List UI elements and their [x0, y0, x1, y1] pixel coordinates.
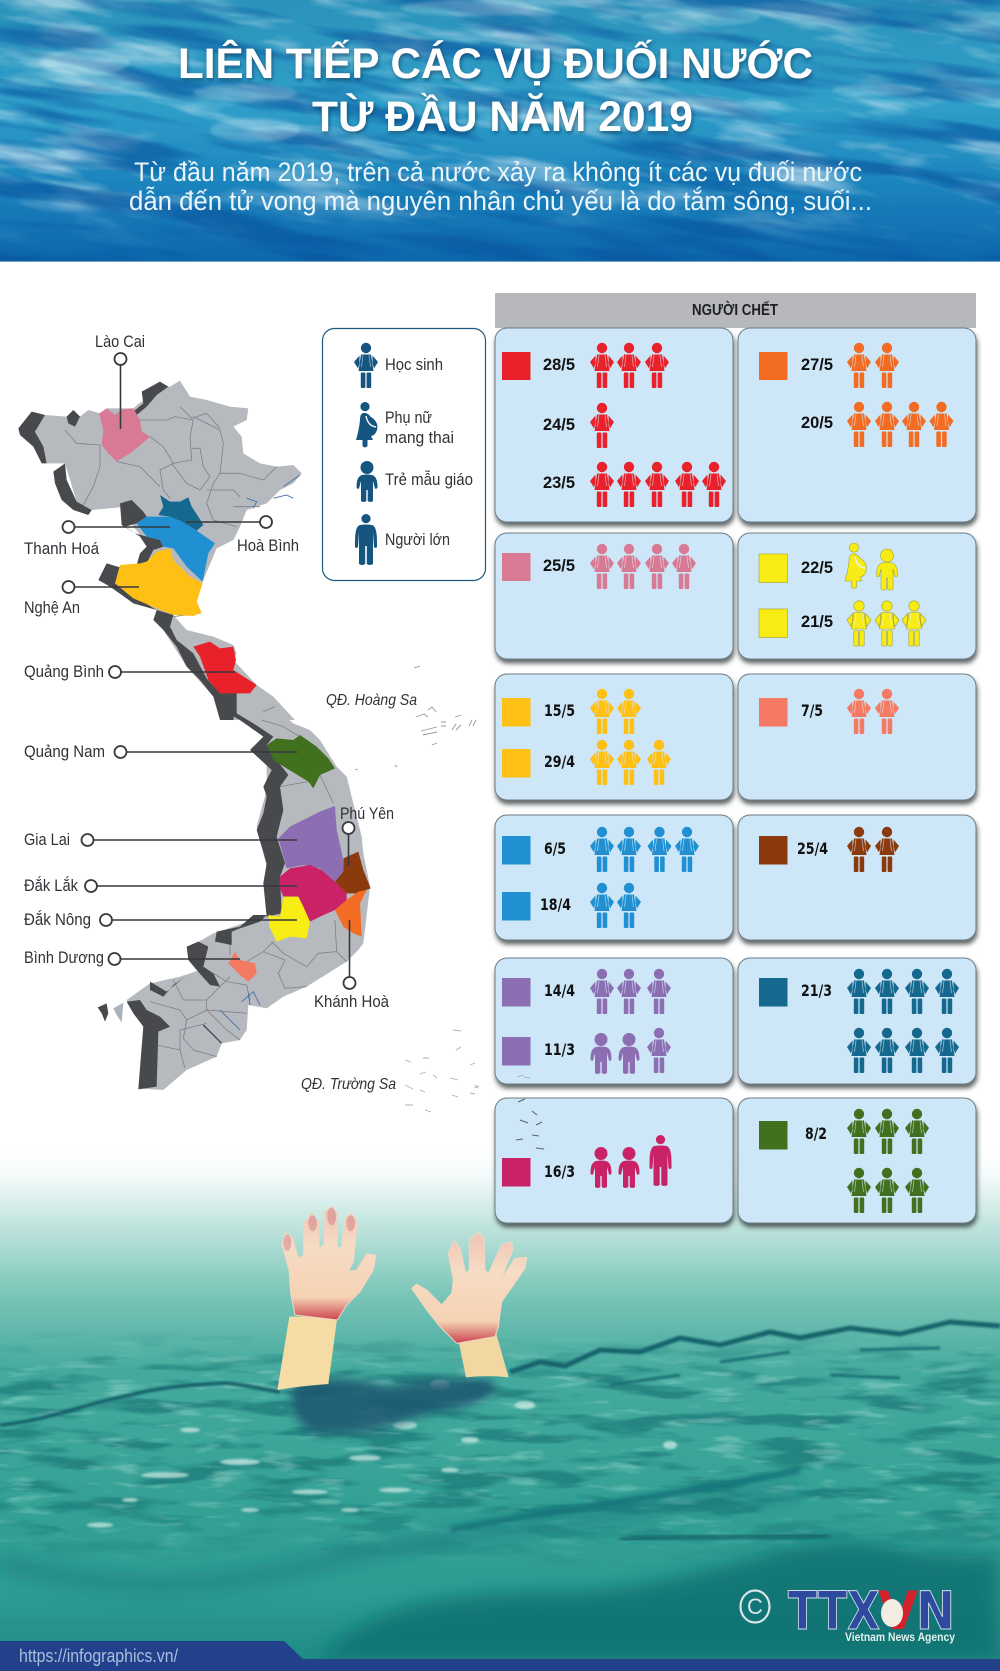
province: Quảng Nam [267, 735, 335, 788]
panel: Gia Lai: 11/3 [544, 1040, 575, 1059]
right hand [412, 1233, 527, 1343]
wordmark: N [916, 1581, 955, 1642]
wordmark: V [878, 1581, 918, 1642]
legend: người lớn: Người lớn [385, 531, 450, 549]
panel: Đắk Lắk: 16/3 [544, 1162, 575, 1181]
panel: Nghệ An: 15/5 [544, 701, 575, 720]
callout: Phú Yên [340, 805, 394, 866]
title [178, 39, 813, 141]
legend: phụ nữ mang thai: Phụ nữ [385, 409, 432, 427]
province: Lào Cai [99, 408, 150, 462]
callout: Đắk Nông [24, 910, 297, 929]
map: highlighted provinces south [228, 735, 371, 982]
panel: Đắk Nông: 21/5 [801, 613, 833, 631]
callout: Phú Yên: Phú Yên [340, 805, 394, 823]
bottom water background [0, 1150, 1000, 1671]
panel: Đắk Nông: 22/5 [801, 559, 833, 577]
province: Thanh Hoá [137, 517, 215, 582]
legend: học sinh: Học sinh [385, 356, 443, 374]
label: Trường Sa: QĐ. Trường Sa [301, 1076, 396, 1093]
map: dark western border south [98, 678, 288, 1089]
legend: phụ nữ mang thai [356, 402, 454, 448]
panel: Gia Lai [495, 958, 733, 1084]
callout: Thanh Hoá: Thanh Hoá [24, 540, 100, 558]
callout: Quảng Nam [24, 743, 297, 761]
province: Quảng Bình [193, 642, 257, 693]
panel: Gia Lai: 14/4 [544, 981, 575, 1000]
table header: người chết: NGƯỜI CHẾT [692, 301, 778, 319]
subtitle [129, 157, 872, 216]
callout: Bình Dương: Bình Dương [24, 949, 104, 967]
footer url: https://infographics.vn/ [19, 1646, 178, 1666]
copyright mark: C [747, 1594, 763, 1619]
legend: trẻ mẫu giáo [356, 461, 473, 502]
title: TỪ ĐẦU NĂM 2019 [312, 92, 693, 141]
illustration: drowning child hands [277, 1206, 527, 1434]
wordmark: TTX [788, 1581, 880, 1642]
panel: Quảng Bình: 28/5 [543, 356, 575, 374]
map callouts [24, 333, 417, 1093]
callout: Hoà Bình [186, 516, 299, 555]
map: dark western border north [18, 382, 237, 720]
province: Bình Dương [228, 952, 257, 982]
callout: Đắk Lắk [24, 876, 297, 895]
callout: Gia Lai: Gia Lai [24, 831, 70, 849]
callout: Nghệ An [24, 581, 139, 617]
panel: Phú Yên: 25/4 [797, 839, 828, 858]
islands: Trường Sa [405, 1030, 479, 1112]
table header: người chết [495, 293, 976, 328]
panel: Hoà Bình: 21/3 [801, 981, 832, 1000]
panel: Quảng Bình: 23/5 [543, 474, 575, 492]
province: Đắk Lắk [279, 865, 347, 922]
header water banner [0, 0, 1000, 262]
callout: Quảng Bình [24, 663, 235, 681]
legend: người lớn [355, 514, 450, 565]
panel: Đắk Nông [738, 533, 976, 659]
province: Phú Yên [335, 852, 371, 893]
panel: Khánh Hoà [738, 328, 976, 522]
panel: Lào Cai [495, 533, 733, 659]
footer bar [0, 1641, 1000, 1671]
legend: học sinh [354, 343, 443, 388]
subtitle: Từ đầu năm 2019, trên cả nước xảy ra không ít các vụ đuối nước [134, 157, 862, 187]
panel: Quảng Nam [738, 1098, 976, 1223]
callout: Đắk Nông: Đắk Nông [24, 910, 91, 929]
panel: Thanh Hoá: 18/4 [540, 895, 571, 914]
callout: Đắk Lắk: Đắk Lắk [24, 876, 79, 895]
left arm [277, 1317, 337, 1390]
panel: Khánh Hoà: 27/5 [801, 356, 833, 374]
panel: Bình Dương: 7/5 [801, 701, 823, 720]
copyright mark [740, 1590, 770, 1622]
panel: Quảng Nam: 8/2 [805, 1124, 827, 1143]
callout: Quảng Nam: Quảng Nam [24, 743, 105, 761]
left hand [282, 1206, 376, 1320]
map: south gray land [127, 678, 370, 1090]
province: Khánh Hoà [335, 890, 367, 937]
callout: Bình Dương [24, 949, 240, 967]
province: Đắk Nông [268, 897, 310, 942]
callout: Quảng Bình: Quảng Bình [24, 663, 104, 681]
panel: Thanh Hoá [495, 815, 733, 940]
panel: Hoà Bình [738, 958, 976, 1084]
map: north gray land [35, 381, 302, 720]
callout: Lào Cai [95, 333, 145, 429]
panel: Nghệ An [495, 674, 733, 800]
callout: Lào Cai: Lào Cai [95, 333, 145, 351]
callout: Khánh Hoà [314, 920, 390, 1011]
label: Hoàng Sa: QĐ. Hoàng Sa [326, 692, 417, 709]
panel: Bình Dương [738, 674, 976, 800]
panel: Lào Cai: 25/5 [543, 557, 575, 575]
panel: Quảng Bình: 24/5 [543, 416, 575, 434]
callout: Khánh Hoà: Khánh Hoà [314, 993, 390, 1011]
right arm [458, 1333, 509, 1377]
legend: trẻ mẫu giáo: Trẻ mẫu giáo [385, 470, 473, 489]
subtitle: dẫn đến tử vong mà nguyên nhân chủ yếu là do tắm sông, suối... [129, 185, 872, 216]
panel: Quảng Bình [495, 328, 733, 522]
tagline: Vietnam News Agency [845, 1632, 956, 1644]
callout: Thanh Hoá [24, 521, 170, 558]
legend: phụ nữ mang thai: mang thai [385, 429, 454, 447]
wordmark [788, 1581, 955, 1642]
panels [495, 328, 976, 1223]
vietnam map [18, 381, 479, 1112]
map: highlighted provinces north [99, 408, 257, 693]
title: LIÊN TIẾP CÁC VỤ ĐUỐI NƯỚC [178, 39, 813, 88]
callout: Hoà Bình: Hoà Bình [237, 537, 299, 555]
islands: Hoàng Sa [355, 666, 476, 770]
panel: Phú Yên [738, 815, 976, 940]
callout: Nghệ An: Nghệ An [24, 599, 80, 617]
callout: Gia Lai [24, 831, 297, 849]
legend [322, 328, 486, 580]
province: Gia Lai [278, 806, 343, 882]
province: Nghệ An [115, 548, 203, 616]
panel: Nghệ An: 29/4 [544, 752, 575, 771]
logo: TTXVN [740, 1581, 956, 1644]
panel: Thanh Hoá: 6/5 [544, 839, 566, 858]
province: Hoà Bình [158, 495, 203, 531]
panel: Đắk Lắk [495, 1098, 733, 1223]
panel: Khánh Hoà: 20/5 [801, 414, 833, 432]
